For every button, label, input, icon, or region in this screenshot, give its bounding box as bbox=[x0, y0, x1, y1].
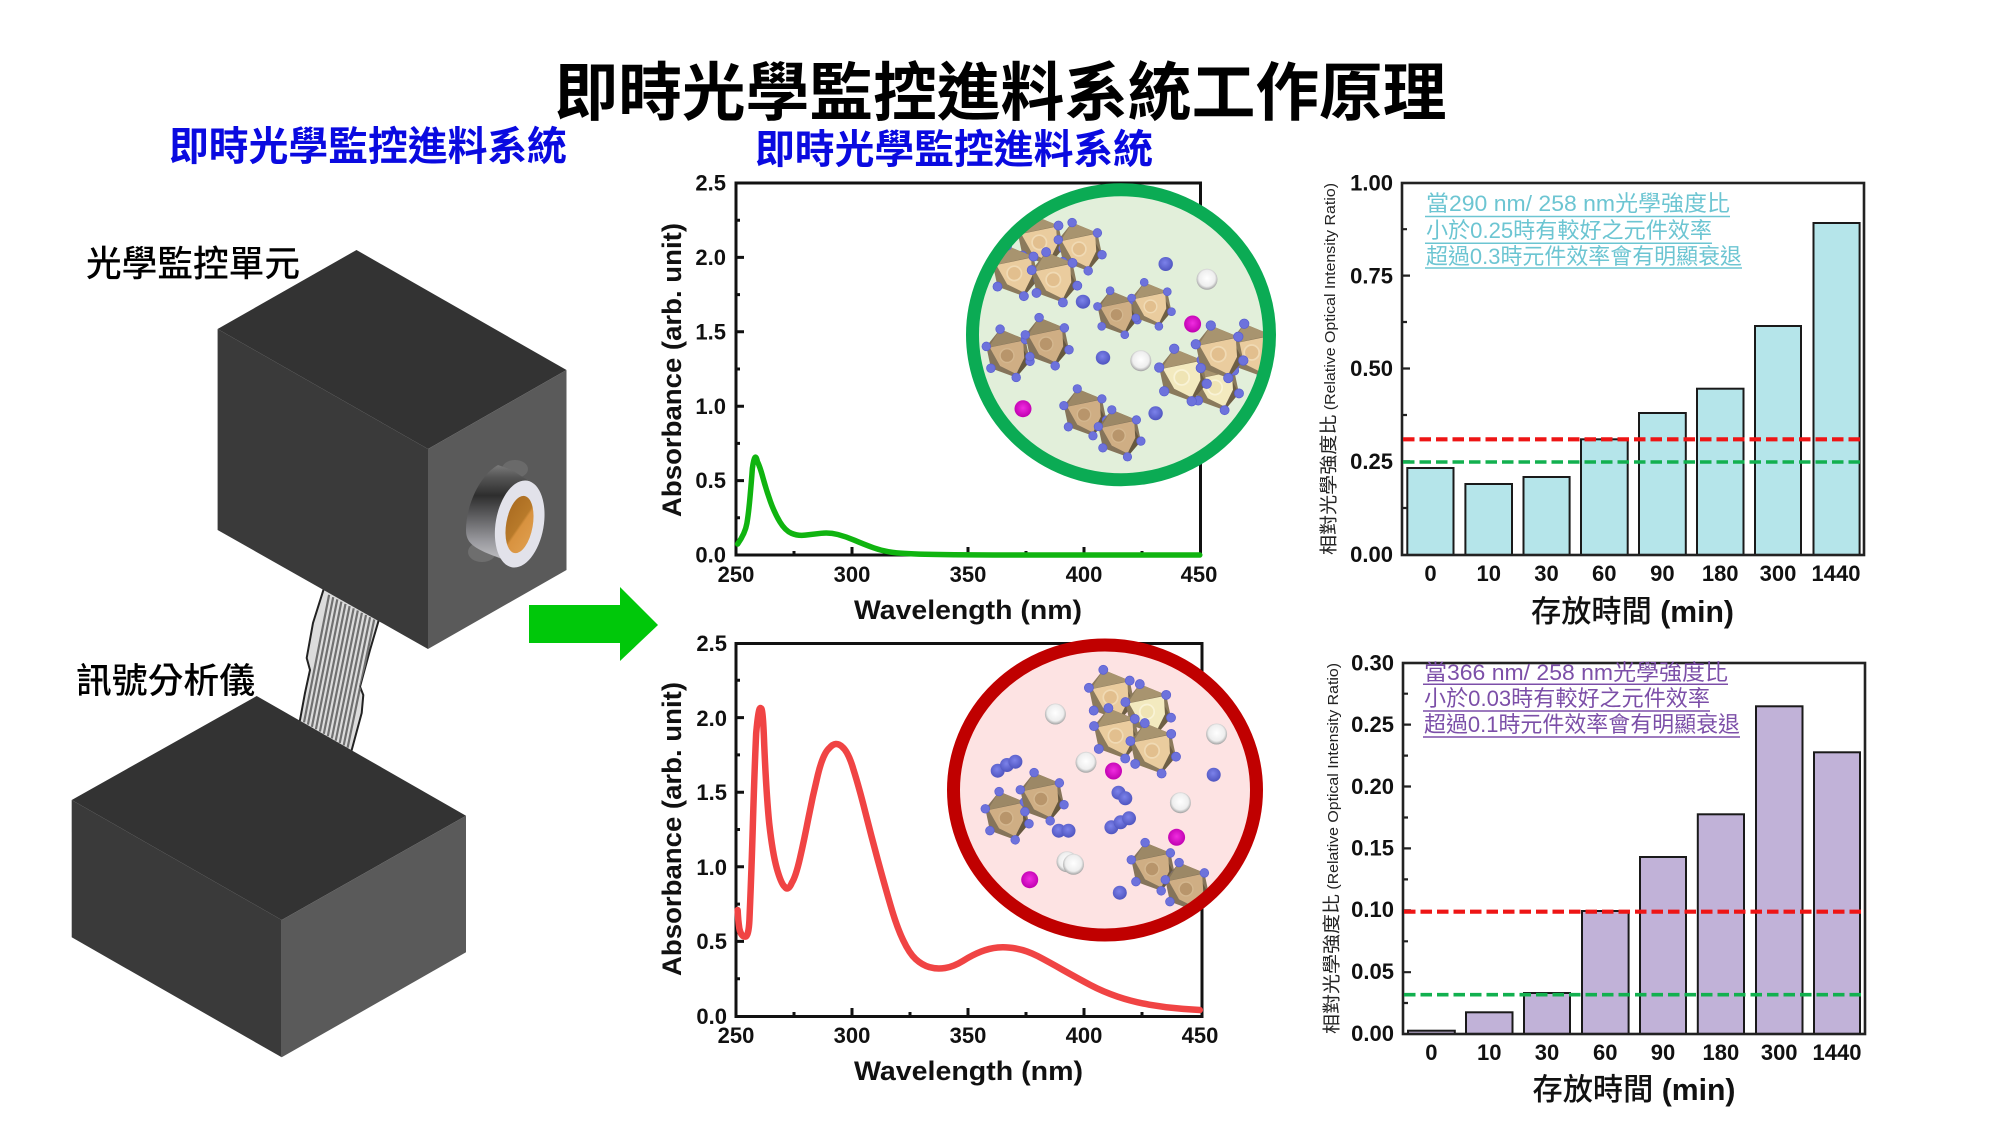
y ticks: 1.0 bbox=[696, 855, 727, 880]
x axis title: Wavelength (nm) bbox=[854, 595, 1082, 625]
x ticks bbox=[1424, 561, 1860, 586]
label: signal analyzer: 訊號分析儀 bbox=[76, 661, 255, 701]
inset: ordered crystals bbox=[972, 190, 1281, 480]
bars bbox=[1407, 223, 1860, 555]
y ticks: 2.0 bbox=[695, 245, 726, 270]
x ticks: 1440 bbox=[1812, 561, 1860, 586]
y ticks: 0.05 bbox=[1351, 959, 1394, 984]
threshold lines bbox=[1403, 439, 1864, 462]
y ticks: 2.5 bbox=[695, 170, 726, 196]
x axis title: 存放時間 (min) bbox=[1531, 594, 1734, 629]
note text: 超過0.1時元件效率會有明顯衰退 bbox=[1424, 712, 1740, 737]
x ticks: 90 bbox=[1650, 561, 1675, 586]
heading: middle system: 即時光學監控進料系統 bbox=[755, 128, 1153, 172]
x ticks: 400 bbox=[1066, 1023, 1102, 1048]
y ticks: 1.5 bbox=[696, 780, 727, 805]
y ticks: 0.25 bbox=[1350, 449, 1393, 474]
bars bbox=[1408, 706, 1860, 1034]
y ticks: 0.20 bbox=[1351, 774, 1394, 799]
y ticks: 0.00 bbox=[1351, 1021, 1394, 1046]
chart: 366/258 nm ratio bars bbox=[1321, 650, 1865, 1107]
x ticks bbox=[1425, 1040, 1861, 1065]
y ticks: 0.25 bbox=[1351, 712, 1394, 737]
x ticks: 30 bbox=[1534, 561, 1559, 586]
y ticks bbox=[695, 170, 726, 568]
y ticks bbox=[696, 631, 727, 1029]
panel: hardware illustration bbox=[72, 244, 566, 1057]
x ticks: 0 bbox=[1424, 561, 1437, 586]
x ticks: 300 bbox=[834, 562, 870, 587]
y ticks: 2.5 bbox=[696, 631, 727, 656]
y ticks: 2.0 bbox=[696, 706, 727, 731]
lens bbox=[466, 460, 551, 571]
x ticks: 90 bbox=[1651, 1040, 1675, 1065]
y ticks: 0.0 bbox=[696, 1004, 727, 1029]
x ticks: 60 bbox=[1592, 561, 1617, 586]
note text: 當366 nm/ 258 nm光學強度比 bbox=[1424, 660, 1728, 685]
title: 即時光學監控進料系統工作原理 bbox=[554, 58, 1446, 129]
y ticks: 0.0 bbox=[695, 542, 726, 568]
x ticks: 0 bbox=[1425, 1040, 1438, 1065]
cable bbox=[296, 585, 380, 758]
y ticks: 1.00 bbox=[1350, 170, 1393, 196]
chart: fresh absorbance spectrum bbox=[657, 170, 1281, 625]
x ticks: 60 bbox=[1593, 1040, 1618, 1065]
y ticks: 1.0 bbox=[695, 394, 726, 419]
x axis title: 存放時間 (min) bbox=[1532, 1072, 1736, 1107]
x ticks: 250 bbox=[718, 1023, 754, 1048]
note text bbox=[1423, 660, 1740, 737]
x ticks: 180 bbox=[1703, 1040, 1739, 1065]
green curve bbox=[738, 457, 1200, 555]
x axis title: Wavelength (nm) bbox=[854, 1056, 1083, 1086]
x ticks bbox=[718, 562, 1217, 587]
y axis title: 相對光學強度比 (Relative Optical Intensity Ratio) bbox=[1321, 663, 1342, 1034]
x ticks: 1440 bbox=[1813, 1040, 1861, 1065]
label: optical monitoring unit: 光學監控單元 bbox=[86, 244, 300, 284]
threshold lines bbox=[1404, 912, 1865, 995]
note text: 當290 nm/ 258 nm光學強度比 bbox=[1426, 191, 1730, 216]
x ticks: 350 bbox=[950, 562, 986, 587]
y ticks bbox=[1351, 650, 1394, 1046]
x ticks: 300 bbox=[1760, 561, 1796, 586]
chart: aged absorbance spectrum bbox=[657, 631, 1256, 1086]
x ticks: 10 bbox=[1476, 561, 1501, 586]
inset: degraded crystals bbox=[954, 645, 1256, 935]
x ticks: 30 bbox=[1535, 1040, 1559, 1065]
arrow bbox=[529, 587, 658, 661]
x ticks: 450 bbox=[1181, 562, 1217, 587]
x ticks: 300 bbox=[834, 1023, 870, 1048]
y axis title: 相對光學強度比 (Relative Optical Intensity Ratio) bbox=[1318, 183, 1339, 555]
chart: 290/258 nm ratio bars bbox=[1318, 170, 1864, 629]
y ticks bbox=[1350, 170, 1393, 567]
note text: 超過0.3時元件效率會有明顯衰退 bbox=[1426, 244, 1742, 269]
x ticks: 400 bbox=[1066, 562, 1102, 587]
optical monitoring unit box bbox=[218, 250, 566, 649]
x ticks: 250 bbox=[718, 562, 754, 587]
note text: 小於0.03時有較好之元件效率 bbox=[1424, 686, 1710, 711]
note text bbox=[1425, 191, 1742, 269]
y ticks: 0.5 bbox=[696, 929, 727, 954]
y ticks: 0.10 bbox=[1351, 897, 1394, 922]
x ticks: 180 bbox=[1702, 561, 1739, 586]
y ticks: 0.00 bbox=[1350, 542, 1393, 567]
x ticks bbox=[718, 1023, 1218, 1048]
heading: left system: 即時光學監控進料系統 bbox=[169, 125, 567, 169]
signal analyzer box bbox=[72, 696, 466, 1057]
y ticks: 1.5 bbox=[695, 320, 726, 344]
y ticks: 0.75 bbox=[1350, 264, 1393, 288]
note text: 小於0.25時有較好之元件效率 bbox=[1426, 218, 1712, 243]
y ticks: 0.50 bbox=[1350, 356, 1393, 381]
red curve bbox=[738, 708, 1200, 1010]
x ticks: 300 bbox=[1761, 1040, 1798, 1065]
x ticks: 450 bbox=[1182, 1023, 1218, 1048]
y axis title: Absorbance (arb. unit) bbox=[657, 223, 687, 517]
y ticks: 0.30 bbox=[1351, 650, 1394, 676]
x ticks: 10 bbox=[1477, 1040, 1501, 1065]
y axis title: Absorbance (arb. unit) bbox=[657, 682, 687, 976]
x ticks: 350 bbox=[950, 1023, 986, 1048]
y ticks: 0.15 bbox=[1351, 836, 1394, 860]
y ticks: 0.5 bbox=[695, 468, 726, 493]
